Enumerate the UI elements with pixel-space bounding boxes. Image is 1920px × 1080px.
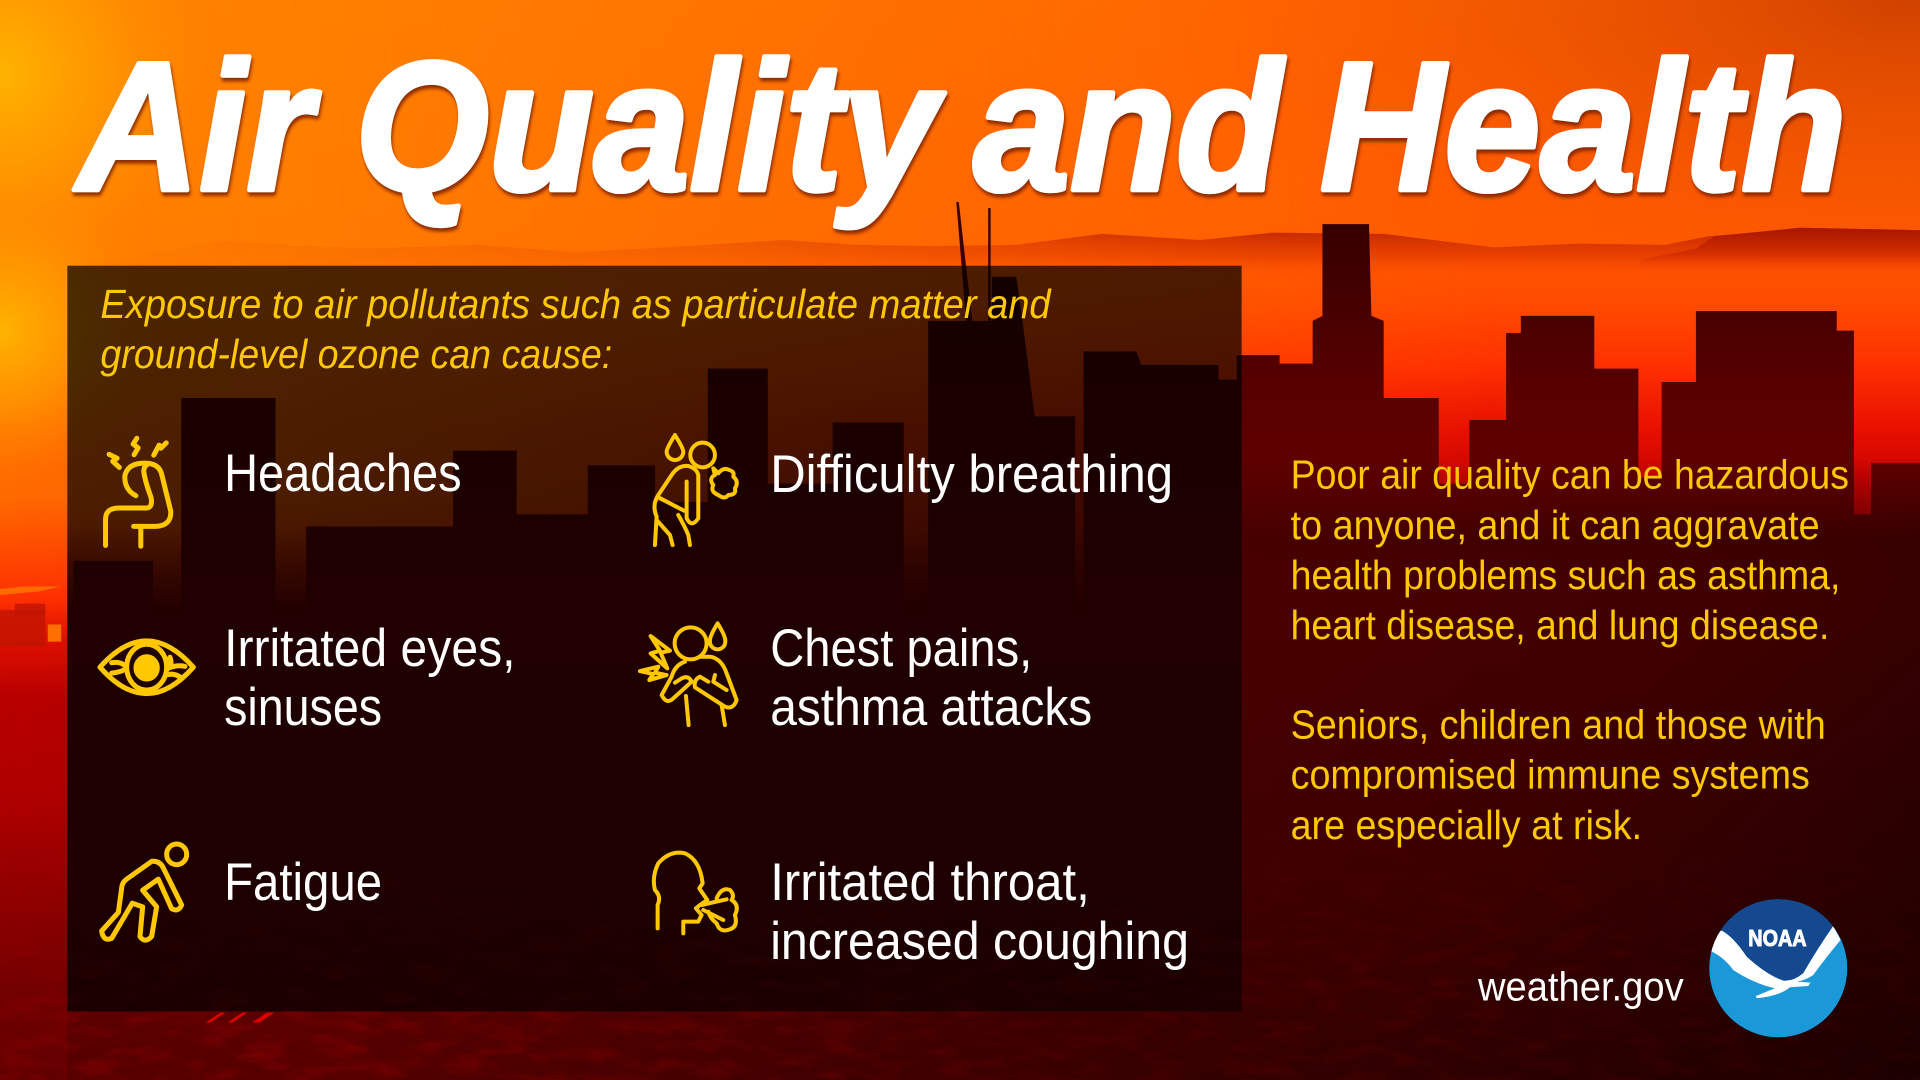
side text: who is at risk: Poor air quality can be hazardous xyxy=(1291,452,1849,498)
background: city skyline silhouette xyxy=(73,202,1920,883)
panel background xyxy=(67,266,1242,1011)
title: Quality xyxy=(355,24,945,229)
list item: Irritated throat, increased coughing xyxy=(770,853,1189,971)
website: weather.gov: weather.gov xyxy=(1477,963,1684,1009)
title xyxy=(73,24,1847,229)
list item: Fatigue: Fatigue xyxy=(224,853,382,912)
list item: Chest pains, asthma attacks: Chest pains, xyxy=(770,619,1032,678)
list item: Irritated eyes, sinuses: Irritated eyes, xyxy=(224,619,516,678)
list item: Irritated eyes, sinuses: sinuses xyxy=(224,678,382,737)
side text: who is at risk: health problems such as asthma, xyxy=(1291,552,1840,598)
icon: irritated throat xyxy=(654,853,737,933)
list item: Chest pains, asthma attacks: asthma attacks xyxy=(770,678,1092,737)
background: hazy lower city mass xyxy=(0,459,1920,1080)
title: Air xyxy=(73,24,320,229)
panel intro text: Exposure to air pollutants such as particulate matter and xyxy=(100,281,1052,327)
side text: who is at risk: Seniors, children and those with xyxy=(1291,701,1826,747)
list item: Headaches: Headaches xyxy=(224,444,462,503)
list item: Chest pains, asthma attacks xyxy=(770,619,1092,737)
list item: Difficulty breathing: Difficulty breathing xyxy=(770,445,1173,504)
panel intro text xyxy=(100,281,1052,377)
background: distant mountain ridge xyxy=(360,228,1920,268)
background: distant horizon buildings on the left edge xyxy=(0,587,61,647)
side text: who is at risk: to anyone, and it can aggravate xyxy=(1291,502,1820,548)
icon: difficulty breathing xyxy=(654,435,737,545)
title: and xyxy=(973,24,1286,229)
logo: NOAA: NOAA xyxy=(1748,925,1807,951)
side text: who is at risk xyxy=(1291,452,1849,848)
panel: health effects xyxy=(67,266,1242,1011)
side text: who is at risk: heart disease, and lung disease. xyxy=(1291,602,1829,648)
icon: fatigue xyxy=(102,844,187,940)
icon: headache xyxy=(106,438,171,546)
title: Health xyxy=(1320,24,1847,229)
side text: who is at risk: compromised immune systems xyxy=(1291,752,1810,798)
logo: NOAA xyxy=(1709,899,1848,1038)
side text: who is at risk: are especially at risk. xyxy=(1291,802,1642,848)
panel intro text: ground-level ozone can cause: xyxy=(100,331,612,377)
list item: Irritated throat, increased coughing: Irritated throat, xyxy=(770,853,1090,912)
list item: Irritated eyes, sinuses xyxy=(224,619,516,737)
icon: chest pains xyxy=(640,623,737,725)
icon: irritated eye xyxy=(100,641,193,694)
list item: Irritated throat, increased coughing: increased coughing xyxy=(770,912,1189,971)
